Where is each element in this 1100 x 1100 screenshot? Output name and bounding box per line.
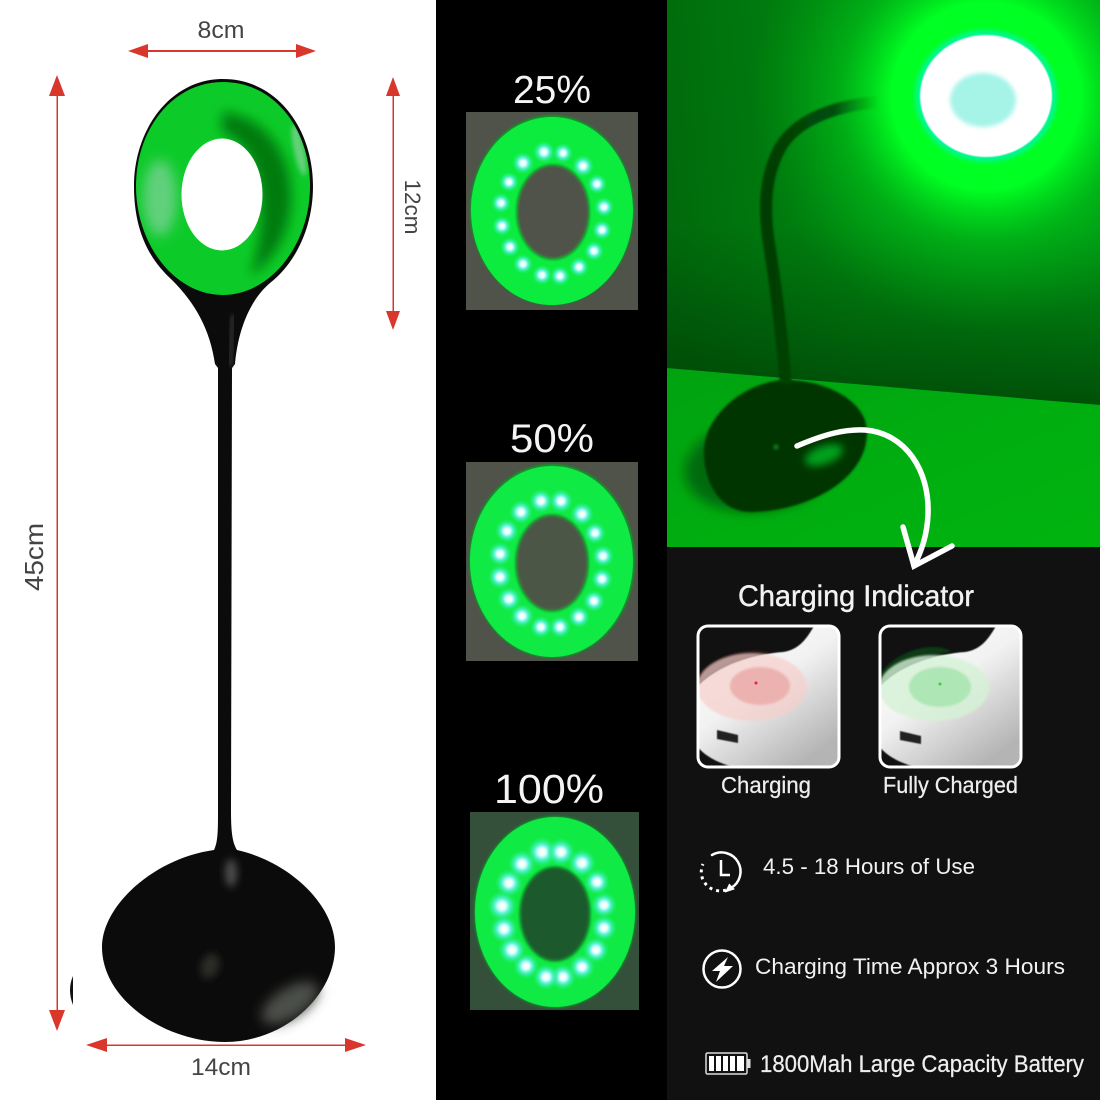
label 25%: 25% — [513, 69, 591, 112]
lamp body — [102, 79, 335, 1042]
icon: charging bolt — [704, 950, 740, 988]
panel: charging details — [667, 547, 1100, 1100]
card: fully charged — [879, 626, 1022, 767]
panel: battery levels — [436, 0, 667, 1100]
text: hours of use: 4.5 - 18 Hours of Use — [763, 854, 975, 879]
label 50%: 50% — [510, 417, 594, 461]
glowing lamp head — [915, 30, 1057, 162]
level 100% photo — [470, 812, 639, 1010]
label charging: Charging — [721, 772, 811, 798]
icon: battery — [706, 1053, 750, 1074]
lamp head hole — [182, 138, 262, 250]
width arrow 8cm — [128, 44, 316, 58]
label 14cm: 14cm — [191, 1054, 251, 1081]
base arrow 14cm — [86, 1038, 366, 1052]
heading: Charging Indicator — [738, 580, 974, 613]
panel: dimensions — [25, 21, 420, 1075]
label fully charged: Fully Charged — [883, 772, 1018, 798]
text: charging time: Charging Time Approx 3 Hours — [755, 954, 1065, 979]
LED dots 25% — [491, 141, 614, 286]
base remnant — [70, 976, 73, 1005]
lamp head ring — [136, 82, 310, 295]
label 12cm: 12cm — [400, 179, 425, 235]
head arrow 12cm — [386, 77, 400, 330]
level 25% photo — [466, 112, 638, 310]
label 100%: 100% — [494, 766, 604, 812]
panel: lamp photo — [667, 0, 1100, 547]
icon: clock — [701, 852, 741, 892]
label 8cm: 8cm — [198, 17, 244, 44]
arrow to charging indicator — [797, 430, 952, 566]
LED dots 50% — [488, 489, 614, 638]
LED dots 100% — [487, 837, 617, 990]
height arrow 45cm — [49, 75, 65, 1031]
lamp gooseneck — [766, 102, 878, 384]
lamp shadow and base — [678, 380, 867, 521]
label 45cm: 45cm — [19, 523, 49, 591]
card: charging — [697, 626, 840, 767]
level 50% photo — [466, 462, 638, 661]
table surface — [667, 368, 1100, 547]
